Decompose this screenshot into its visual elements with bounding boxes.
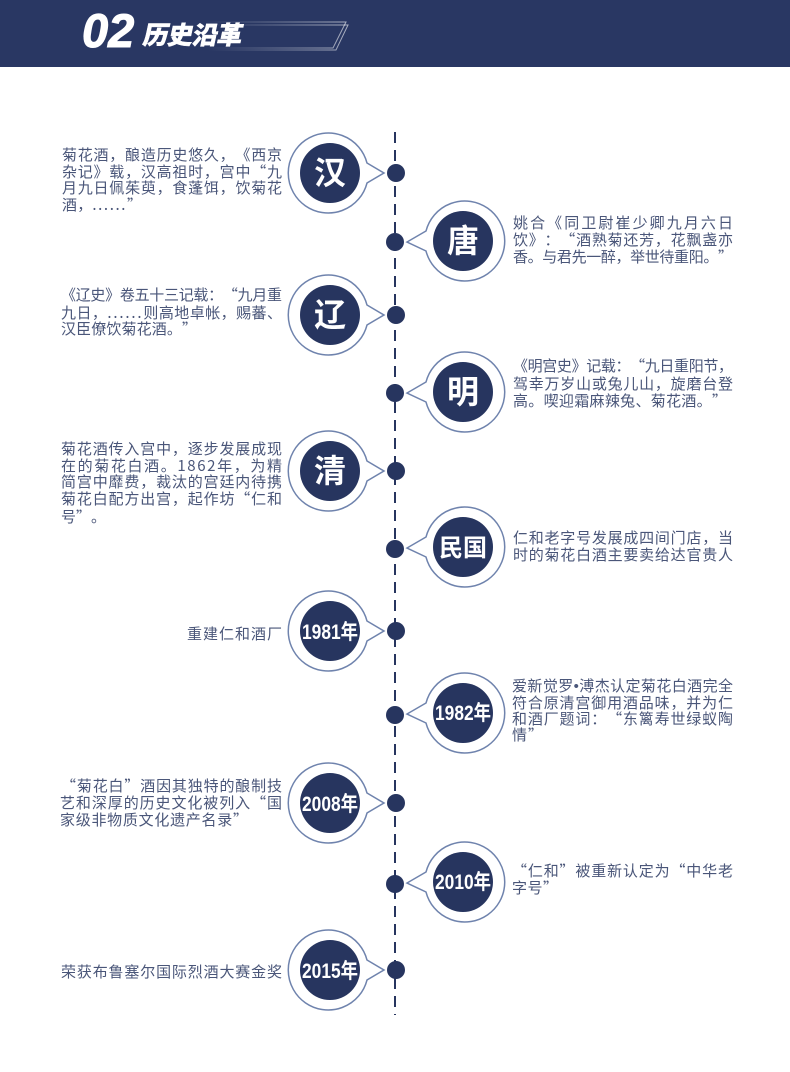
section number: 02: [82, 4, 134, 57]
milestone: 民国: [386, 507, 733, 587]
milestone: 民国: 仁和老字号发展成四间门店，当: [513, 527, 733, 548]
milestone: 2008年: 2008年: [302, 793, 358, 816]
milestone: 2008年: “菊花白”酒因其独特的酿制技: [61, 775, 282, 796]
milestone: 2010年: 字号”: [512, 877, 558, 898]
milestone: 清: 清: [314, 446, 346, 492]
milestone: 1982年: 和酒厂题词：“东篱寿世绿蚁陶: [512, 708, 733, 729]
milestone: 汉: 杂记》载，汉高祖时，宫中“九: [62, 161, 282, 182]
milestone: 1982年: [386, 673, 733, 753]
milestone: 汉: [62, 133, 405, 215]
milestone: 民国: 时的菊花白酒主要卖给达官贵人: [513, 544, 733, 565]
milestone: 2010年: [386, 842, 733, 922]
milestone: 明: 高。喫迎霜麻辣兔、菊花酒。”: [513, 390, 727, 411]
milestone: 清: 简宫中靡费，裁汰的宫廷内待携: [61, 471, 282, 492]
milestone: 2008年: [60, 763, 405, 843]
milestone: 清: 菊花白配方出宫，起作坊“仁和: [61, 488, 282, 509]
milestone: 2008年: 家级非物质文化遗产名录”: [60, 809, 248, 830]
milestone: 2008年: 艺和深厚的历史文化被列入“国: [60, 792, 282, 813]
milestone: 辽: 辽: [314, 290, 346, 336]
milestone: 1982年: 1982年: [435, 702, 491, 725]
section title: 历史沿革: [140, 16, 247, 52]
milestone: 唐: 香。与君先一醉，举世待重阳。”: [513, 246, 733, 267]
milestone: 辽: [61, 275, 405, 355]
milestone: 2010年: 2010年: [435, 871, 491, 894]
milestone: 明: 明: [447, 367, 479, 413]
milestone: 汉: 酒，......”: [62, 194, 142, 215]
header banner: [0, 0, 790, 67]
milestone: 明: 《明宫史》记载：“九日重阳节，: [513, 355, 733, 376]
milestone: 汉: 汉: [314, 148, 346, 194]
milestone: 明: [386, 352, 733, 432]
milestone: 唐: 姚合《同卫尉崔少卿九月六日: [513, 212, 733, 233]
milestone: 清: 菊花酒传入宫中，逐步发展成现: [61, 438, 282, 459]
milestone: 1982年: 符合原清宫御用酒品味，并为仁: [512, 692, 733, 713]
milestone: 辽: 九日，......则高地卓帐，赐蕃、: [61, 302, 282, 323]
milestone: 唐: 饮》：“酒熟菊还芳，花飘盏亦: [513, 229, 733, 250]
milestone: 1981年: [187, 591, 405, 671]
milestone: 2015年: 荣获布鲁塞尔国际烈酒大赛金奖: [61, 961, 282, 982]
milestone: 清: 号”。: [61, 506, 106, 527]
milestone: 1982年: 爱新觉罗•溥杰认定菊花白酒完全: [512, 675, 733, 696]
milestone: 民国: 民国: [439, 528, 487, 563]
milestone: 汉: 月九日佩茱萸，食蓬饵，饮菊花: [62, 177, 282, 198]
milestone: 1981年: 重建仁和酒厂: [187, 623, 282, 644]
milestone: 2015年: [61, 930, 405, 1010]
milestone: 1981年: 1981年: [302, 621, 358, 644]
timeline axis: [394, 132, 396, 1015]
milestone: 2015年: 2015年: [302, 960, 358, 983]
milestone: 唐: 唐: [447, 216, 479, 262]
milestone: 辽: 汉臣僚饮菊花酒。”: [61, 318, 197, 339]
milestone: 清: [61, 431, 405, 527]
milestone: 汉: 菊花酒，酿造历史悠久，《西京: [62, 144, 282, 165]
milestone: 唐: [386, 201, 733, 281]
milestone: 2010年: “仁和”被重新认定为“中华老: [512, 860, 733, 881]
milestone: 1982年: 情”: [512, 724, 543, 745]
milestone: 清: 在的菊花白酒。1862年，为精: [61, 455, 282, 476]
milestone: 明: 驾幸万岁山或兔儿山，旋磨台登: [513, 373, 733, 394]
milestone: 辽: 《辽史》卷五十三记载：“九月重: [61, 284, 282, 305]
